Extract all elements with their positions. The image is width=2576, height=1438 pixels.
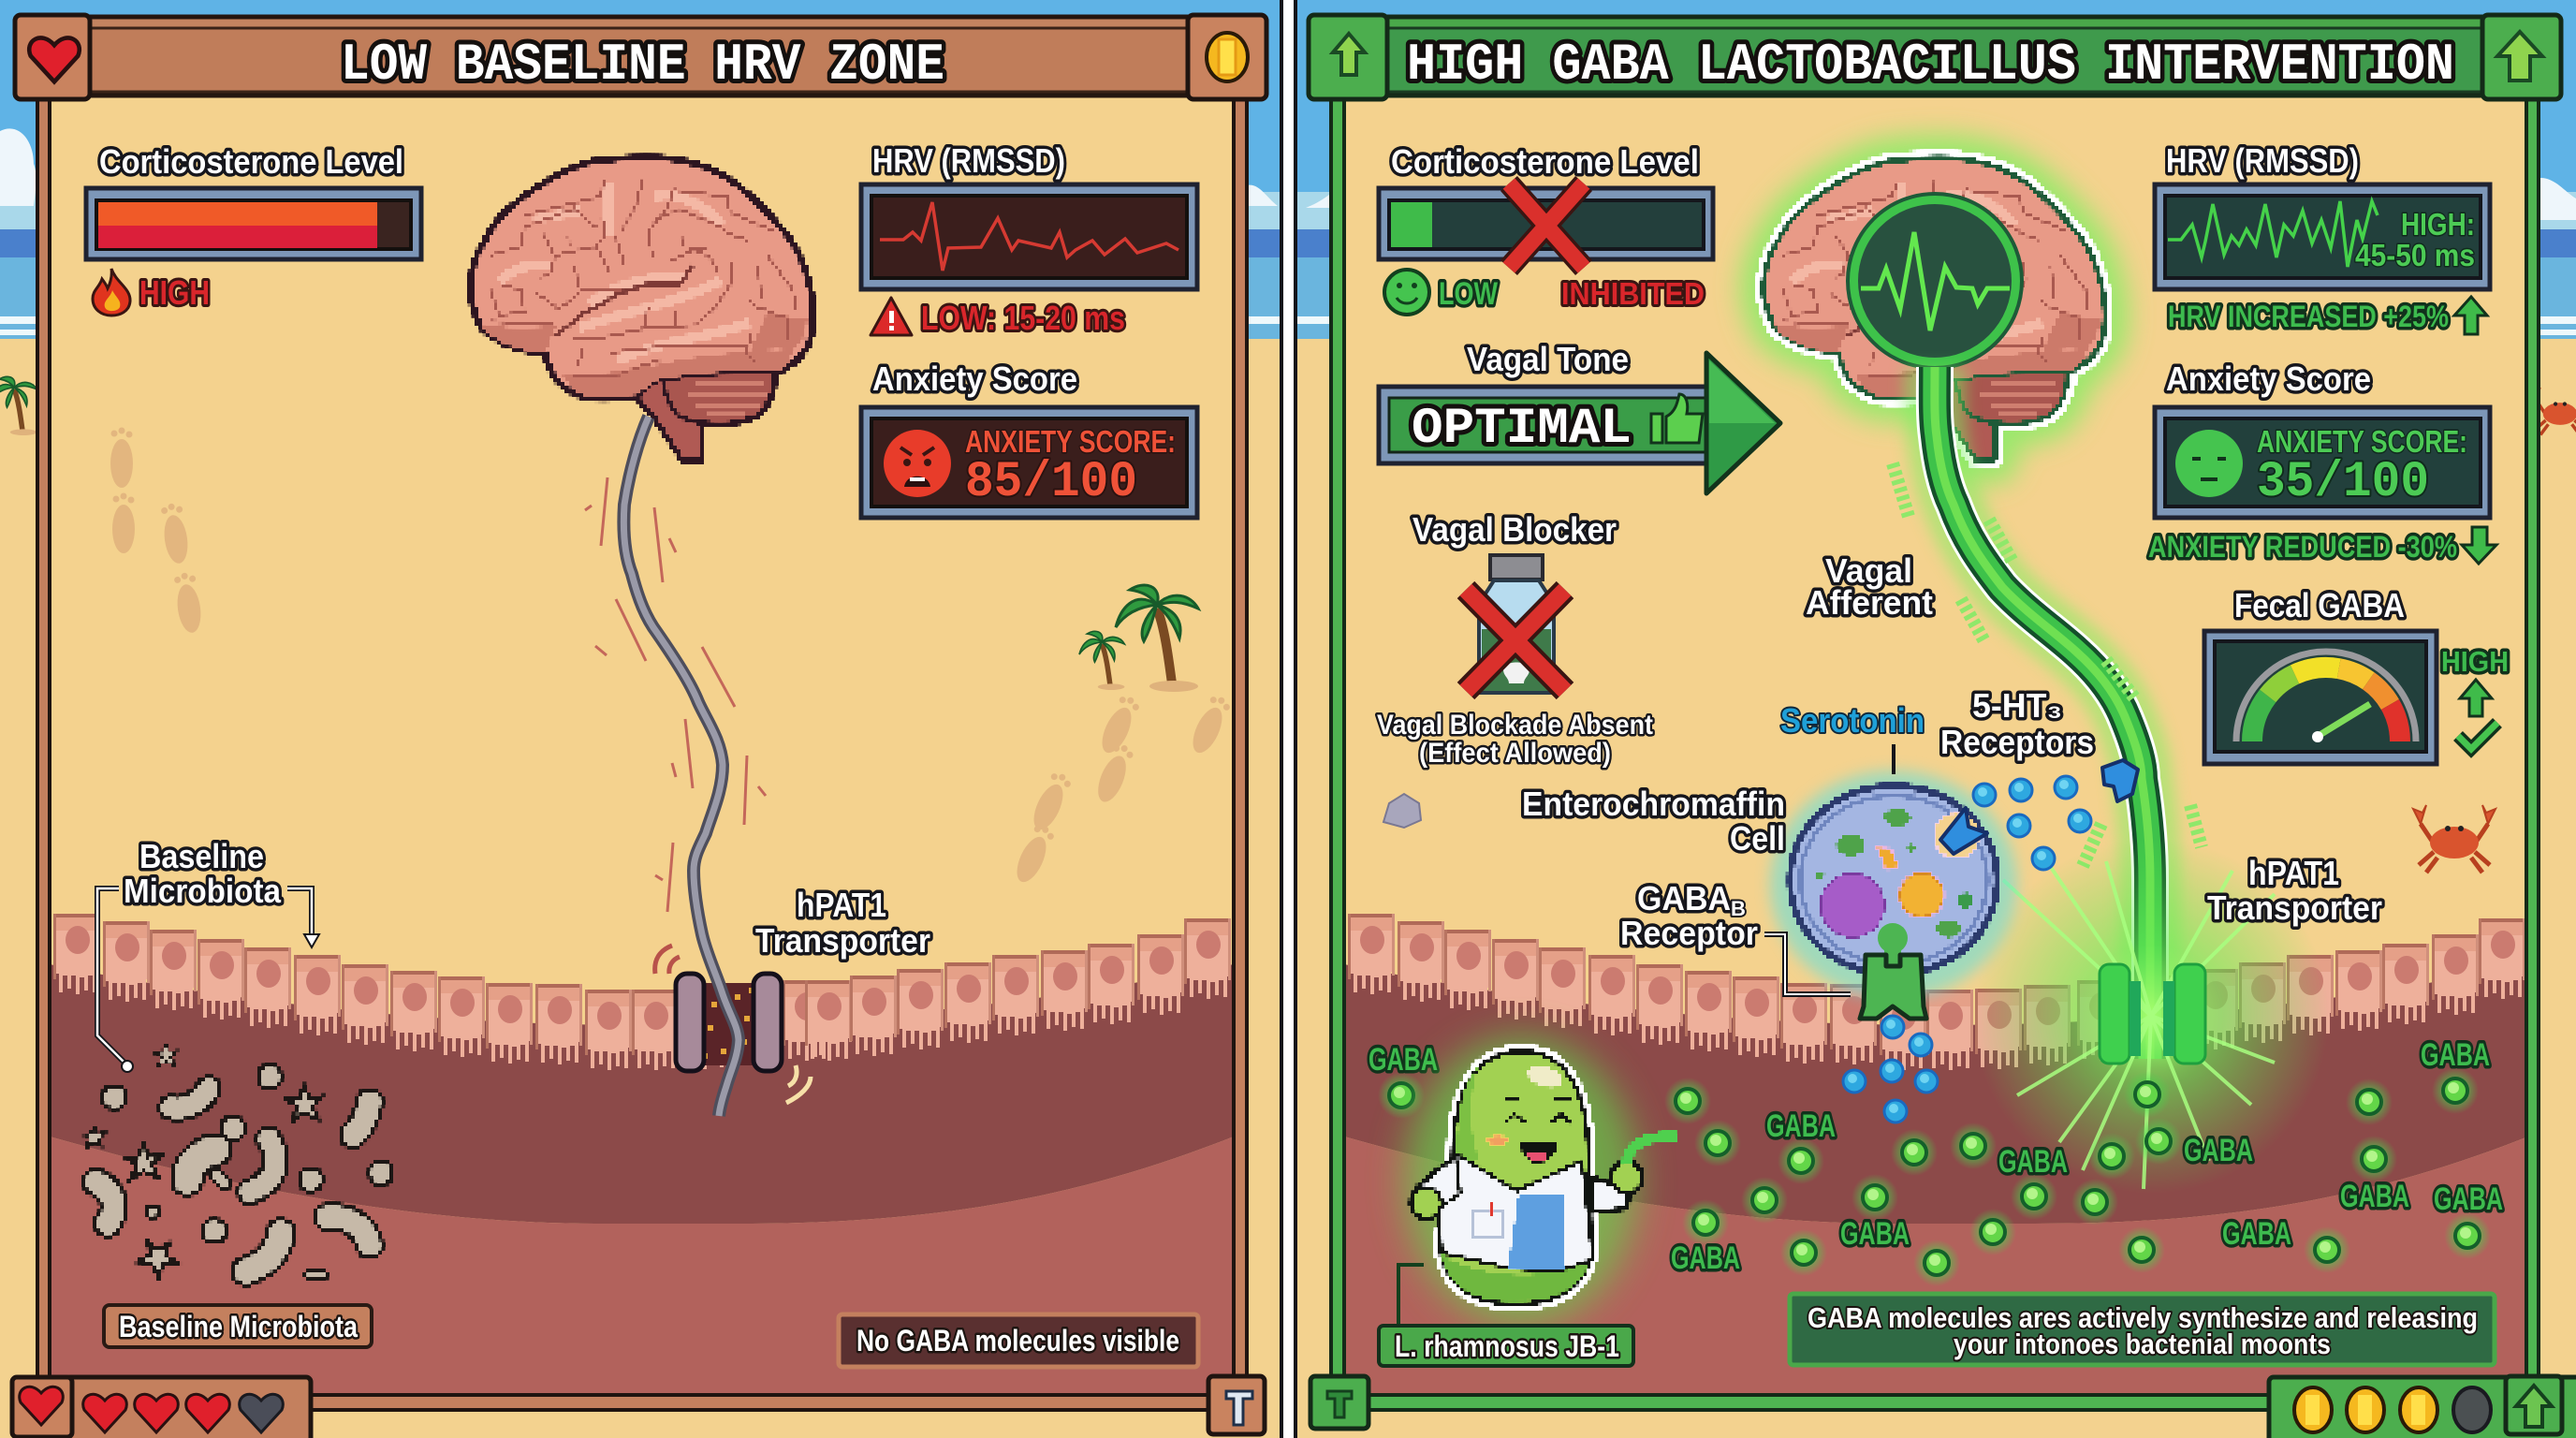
footer: hearts tray <box>12 1377 311 1438</box>
stat: anxiety score 35: Anxiety Score <box>2166 360 2371 398</box>
icon: warning <box>871 298 912 335</box>
gut wall: epithelium and lumen <box>1344 914 2528 1400</box>
GABA labels: GABA <box>2340 1179 2409 1214</box>
callout: baseline microbiota: Microbiota <box>124 872 282 910</box>
transporter label: hPAT1: Transporter <box>755 921 930 960</box>
stat: anxiety score 35 <box>2148 360 2496 564</box>
footprints and sand detail <box>110 427 1233 887</box>
fire core <box>105 290 120 311</box>
stat: HRV RMSSD low: LOW: 15-20 ms <box>921 299 1125 337</box>
arrowhead <box>1706 353 1780 493</box>
vagal blocker: Vagal Blockade Absent <box>1377 710 1653 741</box>
stat: corticosterone level: Corticosterone Level <box>99 142 403 181</box>
icon: thumbs up <box>1651 394 1703 443</box>
icon: heart <box>29 37 80 81</box>
serotonin molecules <box>1843 776 2091 1123</box>
frame strips <box>37 94 1247 1410</box>
icon: smile <box>1384 270 1429 315</box>
mascot: L. rhamnosus bacterium <box>1412 1051 1676 1304</box>
chart: gauge arc <box>2236 652 2416 742</box>
title: LOW BASELINE HRV ZONE <box>341 35 944 95</box>
lab coat <box>1437 1153 1593 1271</box>
icon: palm trees <box>1079 585 1198 692</box>
stat: fecal GABA gauge: HIGH <box>2441 645 2509 678</box>
panel: high GABA lactobacillus intervention <box>1309 15 2576 1438</box>
stat: fecal GABA gauge <box>2204 586 2509 764</box>
stat: anxiety score 35: 35/100 <box>2257 454 2429 511</box>
GABA labels: GABA <box>2184 1133 2253 1168</box>
label: L. rhamnosus JB-1: L. rhamnosus JB-1 <box>1395 1329 1619 1363</box>
label: vagal afferent: Afferent <box>1806 583 1933 622</box>
transporter glow burst <box>1973 838 2329 1194</box>
footer: right cap icon <box>1208 1376 1265 1434</box>
stat: anxiety score 35: ANXIETY REDUCED -30% <box>2148 530 2457 564</box>
stat: corticosterone level <box>86 142 421 315</box>
stat: vagal tone optimal: Vagal Tone <box>1467 340 1629 378</box>
icon: header up marker left <box>1333 34 1365 75</box>
label: 5-HT3 receptors: 5-HT₃ <box>1972 686 2062 725</box>
label: 5-HT3 receptors <box>1940 686 2094 761</box>
panel body: sand <box>50 94 1234 1397</box>
mascot glow <box>1404 1036 1638 1327</box>
icon: down arrow <box>2462 527 2496 564</box>
icon: red cross over bottle <box>1466 590 1565 691</box>
header: low baseline HRV zone <box>15 15 1266 99</box>
icon: up arrow <box>2460 680 2492 716</box>
GABA labels: GABA <box>1766 1108 1836 1144</box>
monitor ring outline <box>1848 194 2022 368</box>
nerve signal marks <box>1893 463 2202 866</box>
label: 5-HT3 receptors: Receptors <box>1940 723 2094 761</box>
transporter label: hPAT1: Transporter <box>2207 888 2382 927</box>
icon: coin <box>1207 33 1248 81</box>
label: enterochromaffin cell <box>1522 785 1785 858</box>
icon: calm face <box>2175 430 2243 497</box>
stat: HRV RMSSD high: 45-50 ms <box>2355 238 2475 272</box>
icon: fire <box>93 269 130 315</box>
vagal blocker <box>1377 510 1653 769</box>
footer: coins tray <box>2269 1376 2576 1438</box>
title: HIGH GABA LACTOBACILLUS INTERVENTION <box>1407 35 2454 95</box>
GABA molecules <box>1378 1067 2491 1286</box>
label: serotonin <box>1780 701 1925 774</box>
GABA labels: GABA <box>1840 1216 1910 1252</box>
label: enterochromaffin cell: Cell <box>1730 819 1785 858</box>
transporter label: hPAT1: hPAT1 <box>797 886 886 924</box>
stat: corticosterone level: HIGH <box>139 273 210 312</box>
stat: HRV RMSSD high: HIGH: <box>2401 207 2475 242</box>
label: vagal afferent <box>1806 551 1933 622</box>
stat: HRV RMSSD high: HRV INCREASED +25% <box>2168 300 2449 333</box>
stat: anxiety score 85: 85/100 <box>965 454 1137 511</box>
icon: serotonin receptor on cell <box>1940 808 1987 854</box>
stat: corticosterone low inhibited: LOW <box>1439 276 1499 312</box>
icon: bottle <box>1479 555 1554 693</box>
label: GABA-B receptor: B <box>1731 897 1746 920</box>
panel: low baseline HRV zone <box>12 15 1266 1438</box>
footer: left cap icon <box>1310 1376 1368 1429</box>
GABA labels: GABA <box>2421 1037 2490 1073</box>
GABA labels <box>1368 1037 2503 1276</box>
label: GABA-B receptor: Receptor <box>1620 914 1758 952</box>
stat: corticosterone low inhibited: INHIBITED <box>1561 276 1705 311</box>
icon: check <box>2458 723 2497 749</box>
text box: GABA molecules description: your intonoes bactenial moonts <box>1954 1328 2331 1360</box>
label: vagal afferent: Vagal <box>1825 551 1912 590</box>
stat: HRV RMSSD high: HRV (RMSSD) <box>2166 141 2359 180</box>
chart: high HRV trace <box>2168 201 2378 267</box>
transporter label: hPAT1 <box>755 886 930 960</box>
stat: corticosterone low inhibited: Corticosterone Level <box>1391 142 1699 181</box>
divider between panels <box>1281 0 1295 1438</box>
icon: brain <box>471 158 812 461</box>
GABA labels: GABA <box>2434 1181 2503 1217</box>
vagal blocker: Vagal Blocker <box>1412 510 1617 549</box>
transporter: hPAT1 closed <box>655 946 811 1103</box>
label: no GABA molecules <box>839 1314 1198 1367</box>
stat: anxiety score 85 <box>861 360 1197 518</box>
monitor circle <box>1853 199 2016 362</box>
icon: header up arrow right <box>2497 32 2542 81</box>
organelles <box>1816 808 1974 938</box>
frame strips <box>1331 94 2539 1410</box>
cell glow <box>1770 770 2017 999</box>
stat: vagal tone optimal <box>1379 340 1780 493</box>
transporter label: hPAT1 <box>2207 854 2382 927</box>
stat: anxiety score 85: ANXIETY SCORE: <box>965 424 1176 459</box>
icon: brain with monitor <box>1764 158 2105 461</box>
stat: anxiety score 35: ANXIETY SCORE: <box>2257 424 2467 459</box>
stat: corticosterone low inhibited <box>1379 142 1713 315</box>
callout: baseline microbiota: Baseline <box>139 837 264 875</box>
icon: up arrow <box>2454 297 2487 334</box>
vagus nerve: weak grey <box>585 417 766 1116</box>
panel body: sand <box>1344 94 2526 1397</box>
GABA labels: GABA <box>1368 1042 1438 1078</box>
label: enterochromaffin cell: Enterochromaffin <box>1522 785 1785 823</box>
chart: low HRV trace <box>880 202 1178 271</box>
icon: anxious face <box>884 430 951 497</box>
header: high GABA intervention <box>1309 15 2561 99</box>
icon: GABA-B receptor <box>1860 923 1926 1019</box>
stat: anxiety score 85: Anxiety Score <box>872 360 1077 398</box>
nerve weak signal marks <box>585 477 766 912</box>
icon: rock <box>1383 794 1421 828</box>
GABA labels: GABA <box>1671 1240 1740 1276</box>
stat: HRV RMSSD low: HRV (RMSSD) <box>872 141 1065 180</box>
transporter label: hPAT1: hPAT1 <box>2248 854 2339 892</box>
bacteria cluster: grey baseline microbiota <box>83 1046 392 1280</box>
brain glow <box>1764 158 2105 461</box>
label: L. rhamnosus JB-1 <box>1379 1265 1633 1366</box>
callout: baseline microbiota <box>97 837 319 1072</box>
label: no GABA molecules: No GABA molecules visible <box>856 1324 1179 1357</box>
chart: brain ECG <box>1861 232 2010 330</box>
label: baseline microbiota box: Baseline Microbiota <box>119 1310 358 1343</box>
face <box>1503 1100 1572 1123</box>
stat: HRV RMSSD low <box>861 141 1197 337</box>
vagal blocker: (Effect Allowed) <box>1419 738 1611 769</box>
stat: fecal GABA gauge: Fecal GABA <box>2234 586 2405 624</box>
label: GABA-B receptor <box>1620 879 1851 994</box>
stat: HRV RMSSD high <box>2155 141 2490 334</box>
vagus nerve: glowing green <box>1893 367 2202 1059</box>
GABA labels: GABA <box>2222 1216 2291 1252</box>
GABA labels: GABA <box>1998 1144 2068 1180</box>
stat: vagal tone optimal: OPTIMAL <box>1412 401 1632 458</box>
text box: GABA molecules description <box>1790 1294 2495 1365</box>
label: baseline microbiota box <box>104 1305 372 1347</box>
enterochromaffin cell <box>1791 786 1997 974</box>
label: GABA-B receptor: GABA <box>1637 879 1731 917</box>
transporter: hPAT1 open <box>2100 964 2205 1064</box>
icon: red cross <box>1509 183 1584 268</box>
gut wall: epithelium and lumen <box>50 914 1234 1400</box>
icon: 5-HT3 receptor on nerve <box>2102 760 2138 801</box>
label: serotonin: Serotonin <box>1780 701 1925 740</box>
text box: GABA molecules description: GABA molecules ares actively synthesize and releasing <box>1808 1301 2478 1334</box>
icon: crab <box>2413 805 2496 873</box>
